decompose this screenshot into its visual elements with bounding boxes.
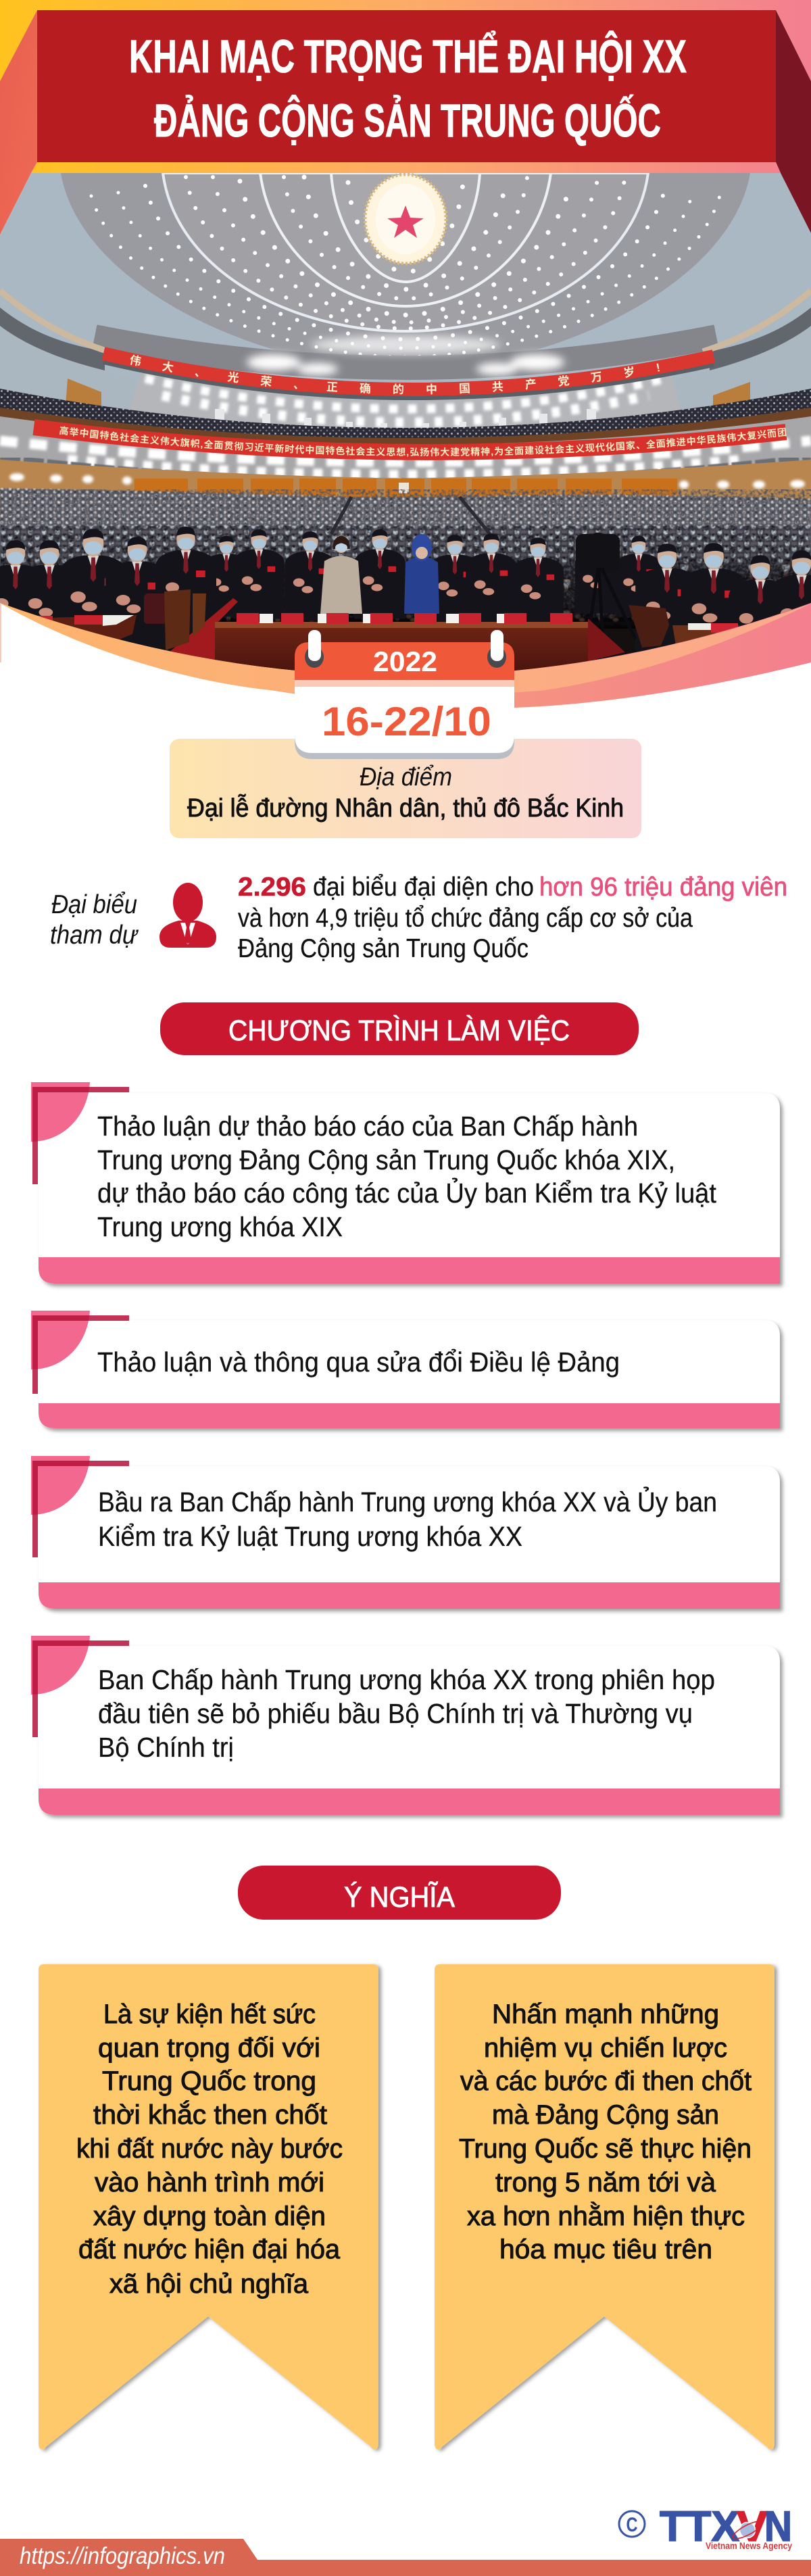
ribbon left: đất nước hiện đại hóa bbox=[78, 2235, 341, 2264]
ribbon right bbox=[435, 1964, 775, 2450]
calendar: 16-22/10 bbox=[322, 699, 491, 744]
ribbon left: xây dựng toàn diện bbox=[93, 2202, 326, 2231]
ribbon left bbox=[39, 1964, 378, 2450]
card 3 bbox=[31, 1456, 780, 1609]
card 3: Kiểm tra Kỷ luật Trung ương khóa XX bbox=[98, 1521, 522, 1552]
front table with name plates bbox=[215, 613, 588, 671]
logo: TTXVN bbox=[660, 2503, 792, 2551]
ribbon left: vào hành trình mới bbox=[95, 2168, 324, 2197]
card 2: Thảo luận và thông qua sửa đổi Điều lệ Đảng bbox=[97, 1346, 620, 1378]
card 1: Trung ương khóa XIX bbox=[97, 1211, 343, 1242]
footer bar: https://infographics.vn bbox=[20, 2543, 225, 2569]
location panel: Đại lễ đường Nhân dân, thủ đô Bắc Kinh bbox=[187, 794, 624, 823]
delegates text: Đảng Cộng sản Trung Quốc bbox=[238, 934, 529, 963]
location panel: Địa điểm bbox=[360, 763, 452, 792]
logo: TTXVN: N bbox=[764, 2503, 792, 2550]
ribbon left: xã hội chủ nghĩa bbox=[109, 2269, 309, 2299]
delegates text: 2.296 bbox=[238, 873, 306, 902]
ribbon left: Là sự kiện hết sức bbox=[103, 1999, 316, 2029]
logo: TTXVN: TTX bbox=[660, 2503, 739, 2550]
icon: delegate person bbox=[159, 883, 216, 948]
card 4: đầu tiên sẽ bỏ phiếu bầu Bộ Chính trị và Thường vụ bbox=[98, 1698, 693, 1729]
delegates label: Đại biểu bbox=[51, 890, 137, 919]
ribbon left: Trung Quốc trong bbox=[102, 2066, 316, 2096]
ribbon right: mà Đảng Cộng sản bbox=[492, 2100, 719, 2130]
seating above the banner bbox=[95, 337, 716, 368]
card 1: dự thảo báo cáo công tác của Ủy ban Kiểm tra Kỷ luật bbox=[97, 1177, 717, 1209]
icon: ceiling star emblem bbox=[365, 174, 446, 264]
delegates label: tham dự bbox=[50, 921, 139, 950]
card 3: Bầu ra Ban Chấp hành Trung ương khóa XX và Ủy ban bbox=[98, 1486, 717, 1517]
card 4 bbox=[31, 1636, 780, 1815]
lower ceiling lights bbox=[0, 416, 811, 479]
lower red banner bbox=[32, 419, 787, 460]
footer bar bbox=[0, 2539, 811, 2576]
card 4: Bộ Chính trị bbox=[98, 1732, 234, 1763]
heading: significance bbox=[238, 1866, 561, 1920]
delegates text bbox=[238, 873, 787, 963]
ribbon right: hóa mục tiêu trên bbox=[499, 2235, 712, 2264]
title bbox=[129, 30, 687, 147]
heading: significance: Ý NGHĨA bbox=[344, 1881, 455, 1914]
ribbon right: và các bước đi then chốt bbox=[460, 2066, 752, 2096]
logo: TTXVN: Vietnam News Agency bbox=[706, 2540, 792, 2551]
card 1 bbox=[31, 1082, 780, 1284]
lower red banner: 高举中国特色社会主义伟大旗帜,全面贯彻习近平新时代中国特色社会主义思想,弘扬伟大建党精神,为全面建设社会主义现代化国家、全面推进中华民族伟大复兴而团结奋斗! bbox=[59, 426, 787, 457]
icon: copyright bbox=[619, 2511, 645, 2537]
under-banner soffit bbox=[103, 362, 714, 397]
ribbon left: quan trọng đối với bbox=[98, 2033, 320, 2063]
ribbon right: xa hơn nhằm hiện thực bbox=[467, 2201, 745, 2231]
wooden back wall bbox=[0, 460, 811, 520]
left desks and carpet bbox=[38, 589, 238, 660]
ribbon right: Trung Quốc sẽ thực hiện bbox=[459, 2134, 752, 2164]
icon: copyright: C bbox=[626, 2514, 638, 2536]
delegates crowd bbox=[0, 488, 811, 629]
location panel bbox=[170, 739, 641, 838]
heading: working program bbox=[160, 1002, 639, 1055]
calendar: 2022 bbox=[373, 646, 437, 677]
delegates text: đại biểu đại diện cho bbox=[313, 873, 534, 902]
upper balcony crowd bbox=[0, 389, 811, 439]
delegates text: và hơn 4,9 triệu tổ chức đảng cấp cơ sở của bbox=[238, 904, 693, 933]
ribbon right: nhiệm vụ chiến lược bbox=[484, 2033, 727, 2063]
title panel bbox=[37, 10, 776, 162]
card 1: Thảo luận dự thảo báo cáo của Ban Chấp hành bbox=[97, 1111, 638, 1142]
camera on tripod bbox=[576, 534, 635, 649]
ribbon left: khi đất nước này bước bbox=[76, 2134, 343, 2164]
photo: congress hall bbox=[0, 173, 811, 671]
heading: working program: CHƯƠNG TRÌNH LÀM VIỆC bbox=[228, 1015, 570, 1047]
card 2 bbox=[31, 1311, 780, 1428]
right desks bbox=[588, 605, 740, 661]
upper red banner: 伟大、光荣、正确的中国共产党万岁! bbox=[130, 354, 660, 395]
card 4: Ban Chấp hành Trung ương khóa XX trong phiên họp bbox=[98, 1664, 715, 1695]
delegates text: hơn 96 triệu đảng viên bbox=[539, 873, 787, 902]
header corners bbox=[0, 0, 811, 235]
front row delegates bbox=[0, 527, 811, 666]
decorative crescent under photo bbox=[0, 603, 811, 708]
card 1: Trung ương Đảng Cộng sản Trung Quốc khóa XIX, bbox=[97, 1144, 675, 1175]
ribbon left: thời khắc then chốt bbox=[93, 2099, 327, 2130]
logo: TTXVN: V bbox=[737, 2503, 768, 2550]
ribbon right: Nhấn mạnh những bbox=[492, 1999, 719, 2029]
balcony doors bbox=[66, 379, 750, 406]
side walls bbox=[0, 318, 135, 416]
ribbon right: trong 5 năm tới và bbox=[495, 2168, 716, 2197]
delegates label bbox=[50, 890, 139, 950]
calendar bbox=[295, 630, 514, 759]
